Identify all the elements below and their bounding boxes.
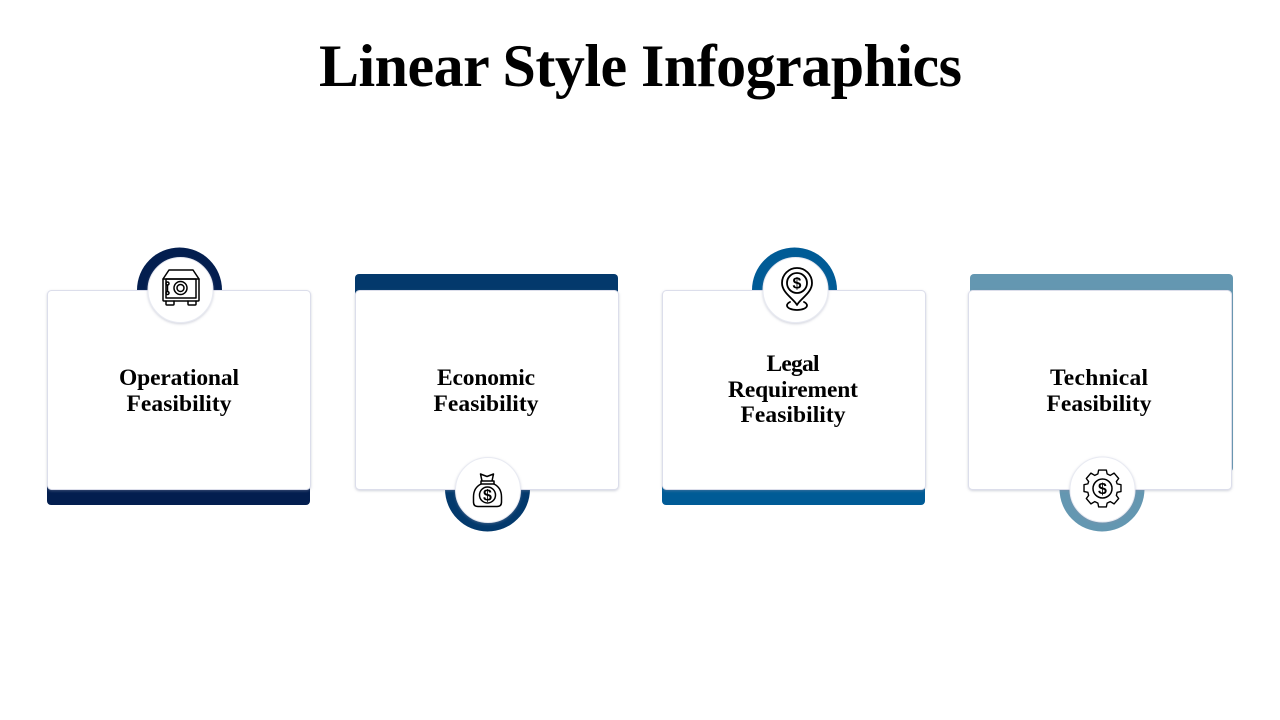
card: legal (662, 290, 926, 490)
label: operational feasibility (119, 365, 239, 417)
accent arc: mid blue top (752, 248, 837, 332)
icon: gear dollar (1084, 470, 1121, 507)
label: legal requirement feasibility: Legal (766, 351, 820, 377)
card: operational (48, 290, 310, 490)
icon: money bag (474, 474, 502, 506)
panel: legal requirement feasibility (662, 248, 926, 505)
accent bar: mid blue bottom (662, 470, 925, 505)
accent arc: steel blue bottom (1060, 446, 1144, 532)
title: Linear Style Infographics (319, 33, 962, 99)
label: economic feasibility: Feasibility (434, 391, 539, 417)
panel: operational feasibility (47, 248, 310, 505)
icon badge circle (1070, 457, 1135, 522)
label: economic feasibility: Economic (437, 365, 535, 391)
panel: economic feasibility (355, 274, 618, 532)
icon: map pin dollar (782, 268, 812, 310)
accent bar: steel blue top (970, 274, 1233, 472)
icon: map pin dollar: $ (793, 276, 802, 292)
label: operational feasibility: Feasibility (126, 391, 232, 417)
accent bar: navy bottom (47, 470, 310, 505)
label: economic feasibility (434, 365, 539, 417)
icon badge circle (763, 258, 828, 322)
label: technical feasibility: Feasibility (1046, 391, 1152, 417)
card: economic (356, 290, 618, 490)
icon badge circle (148, 258, 213, 322)
accent arc: blue bottom (445, 446, 530, 532)
panel: technical feasibility (968, 274, 1233, 532)
label: technical feasibility: Technical (1050, 365, 1148, 391)
icon: money bag: $ (483, 488, 492, 504)
card: technical (968, 290, 1232, 490)
icon badge circle (456, 458, 520, 522)
label: technical feasibility (1046, 365, 1152, 417)
label: legal requirement feasibility (728, 351, 858, 428)
accent bar: blue top (355, 274, 618, 314)
icon: gear dollar: $ (1098, 481, 1107, 498)
label: legal requirement feasibility: Feasibility (740, 402, 846, 428)
accent arc: navy top (137, 248, 222, 332)
icon: safe (163, 270, 199, 305)
label: legal requirement feasibility: Requirement (728, 377, 858, 403)
label: operational feasibility: Operational (119, 365, 239, 391)
